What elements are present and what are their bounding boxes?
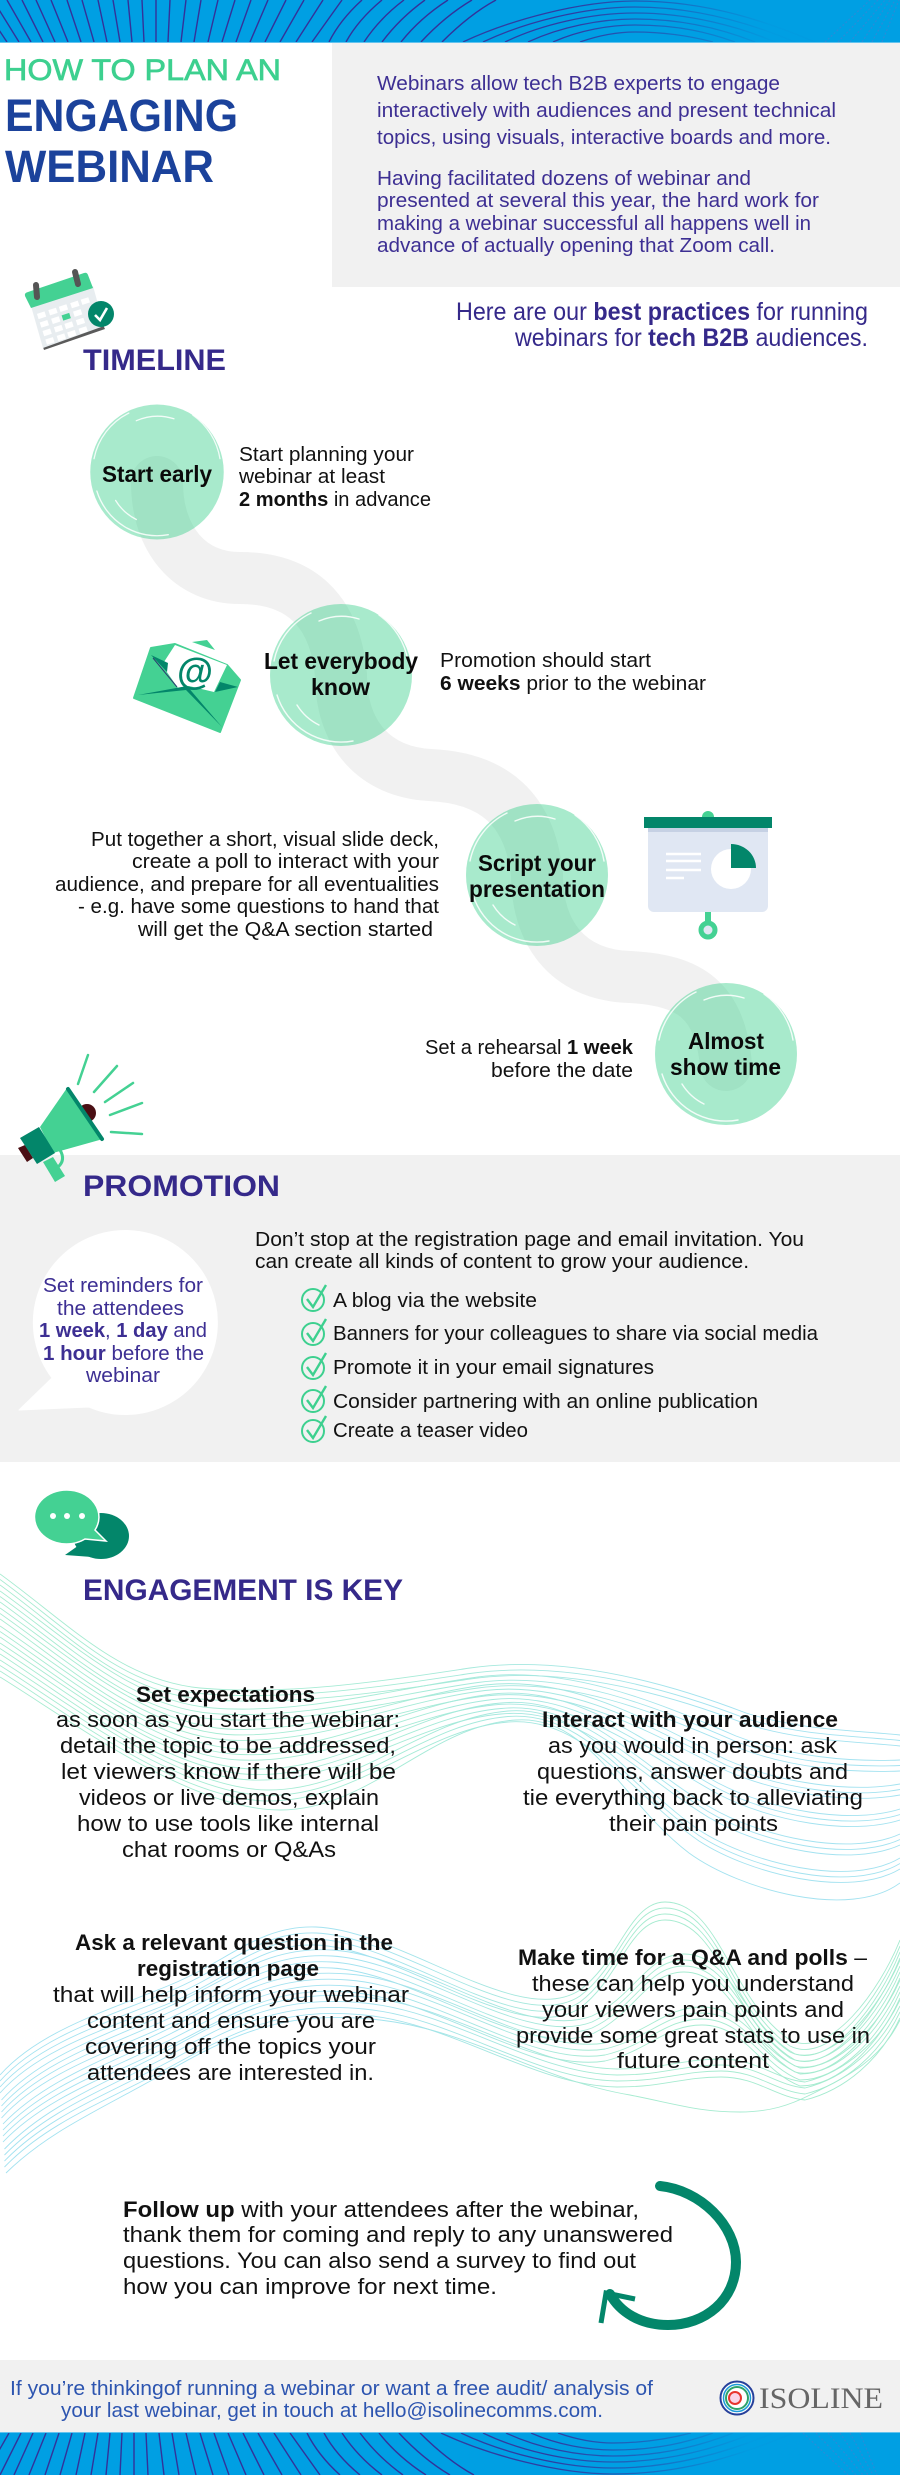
step 4: almost show time (425, 983, 797, 1125)
step 4 description: before the date (491, 1060, 633, 1082)
icon: email envelope (134, 640, 240, 732)
speech bubble reminder: Set reminders for (43, 1275, 203, 1297)
step 3 description: audience, and prepare for all eventualities (55, 874, 439, 896)
step 1 description: 2 months in advance (239, 489, 431, 511)
tip: follow up: thank them for coming and reply to any unanswered (123, 2222, 673, 2247)
check item 1: A blog via the website (333, 1290, 537, 1312)
step 1 description: Start planning your (239, 444, 414, 466)
step 1 label: Start early (102, 461, 212, 487)
step 3 label: Script your (478, 850, 596, 876)
icon: presentation board (644, 811, 772, 937)
arrow: circular follow up (601, 2186, 736, 2325)
tip: make time for Q&A and polls: Make time for a Q&A and polls – (518, 1945, 868, 1970)
tip: interact with your audience: questions, answer doubts and (537, 1759, 848, 1784)
step 4 circle (655, 983, 797, 1125)
check item 3: Promote it in your email signatures (333, 1357, 654, 1379)
panel: introduction (332, 43, 900, 287)
step 1 description: webinar at least (238, 466, 385, 488)
step 3 description (55, 829, 439, 941)
intro paragraph two: making a webinar successful all happens well in (377, 213, 811, 235)
step 3 label (469, 850, 605, 902)
bottom decorative band (0, 2432, 900, 2475)
tip: follow up: Follow up with your attendees after the webinar, (123, 2197, 639, 2222)
intro paragraph one: topics, using visuals, interactive boards and more. (377, 127, 831, 149)
intro paragraph two: presented at several this year, the hard work for (377, 190, 819, 212)
icon: megaphone (18, 1055, 142, 1182)
step 4 label: show time (670, 1054, 781, 1080)
step 3 description: - e.g. have some questions to hand that (78, 896, 439, 918)
step 3 circle (466, 804, 608, 946)
tip: ask a relevant question: covering off the topics your (85, 2034, 376, 2059)
promotion intro text: Don’t stop at the registration page and email invitation. You (255, 1229, 804, 1251)
step 2 label (264, 648, 418, 700)
tip: set expectations: detail the topic to be addressed, (60, 1733, 396, 1758)
tip: interact with your audience: as you would in person: ask (548, 1733, 838, 1758)
step 2 label: know (311, 674, 370, 700)
speech bubble reminder: 1 hour before the (43, 1343, 204, 1365)
tip: follow up: questions. You can also send a survey to find out (123, 2248, 636, 2273)
title (4, 54, 281, 192)
step 3 description: will get the Q&A section started (137, 919, 433, 941)
tip: set expectations: chat rooms or Q&As (122, 1837, 336, 1862)
timeline winding path (157, 482, 726, 1065)
title: ENGAGING (5, 90, 238, 141)
footer call to action: If you’re thinkingof running a webinar or want a free audit/ analysis of (10, 2378, 653, 2400)
promotion intro text: can create all kinds of content to grow your audience. (255, 1251, 749, 1273)
step 2 circle (270, 604, 412, 746)
step 3: script your presentation (55, 804, 608, 946)
tip: make time for Q&A and polls: future content (617, 2048, 769, 2073)
tip: ask a relevant question: content and ensure you are (87, 2008, 375, 2033)
tip: ask a relevant question: registration page (137, 1956, 319, 1981)
tip: interact with your audience: tie everything back to alleviating (523, 1785, 863, 1810)
check item 2: Banners for your colleagues to share via social media (333, 1323, 819, 1345)
speech bubble reminder (19, 1230, 217, 1414)
icon: chat bubbles (34, 1490, 129, 1559)
tip: interact with your audience (523, 1707, 863, 1836)
tip: set expectations: as soon as you start the webinar: (56, 1707, 400, 1732)
panel: footer (0, 2360, 900, 2432)
step 4 label (670, 1028, 781, 1080)
check item 4: Consider partnering with an online publication (333, 1391, 758, 1413)
step 2 label: Let everybody (264, 648, 418, 674)
tip: follow up (123, 2197, 673, 2299)
title: WEBINAR (5, 141, 214, 192)
step 2: let everybody know (264, 604, 706, 746)
tip: ask a relevant question: attendees are interested in. (87, 2060, 374, 2085)
step 2 description (440, 650, 706, 695)
icon: email envelope: @ (177, 651, 213, 692)
step 3 description: create a poll to interact with your (132, 851, 439, 873)
tip: set expectations (56, 1682, 400, 1862)
tip: interact with your audience: Interact with your audience (542, 1707, 838, 1732)
heading: engagement is key: ENGAGEMENT IS KEY (83, 1574, 403, 1607)
best practices statement: Here are our best practices for running (456, 298, 868, 326)
intro paragraph one: Webinars allow tech B2B experts to engage (377, 73, 780, 95)
Isoline logo: ISOLINE (759, 2382, 883, 2415)
step 1: start early (90, 405, 431, 539)
best practices statement: webinars for tech B2B audiences. (514, 324, 868, 352)
checklist (302, 1285, 819, 1442)
step 2 description: Promotion should start (440, 650, 651, 672)
tip: make time for Q&A and polls (516, 1945, 870, 2073)
tip: make time for Q&A and polls: these can help you understand (532, 1971, 854, 1996)
panel: promotion (0, 1155, 900, 1462)
promotion intro text (255, 1229, 804, 1273)
best practices statement (456, 298, 868, 352)
step 4 label: Almost (688, 1028, 764, 1054)
step 3 label: presentation (469, 876, 605, 902)
step 4 description: Set a rehearsal 1 week (425, 1037, 634, 1059)
title: HOW TO PLAN AN (4, 54, 281, 87)
speech bubble reminder: 1 week, 1 day and (39, 1320, 207, 1342)
step 4 description (425, 1037, 634, 1082)
tip: set expectations: Set expectations (136, 1682, 315, 1707)
speech bubble reminder: webinar (85, 1365, 160, 1387)
tip: interact with your audience: their pain points (609, 1811, 778, 1836)
intro paragraph two: advance of actually opening that Zoom call. (377, 235, 775, 257)
speech bubble reminder: the attendees (57, 1298, 184, 1320)
footer call to action (10, 2378, 653, 2422)
tip: follow up: how you can improve for next time. (123, 2274, 497, 2299)
check item 1 (302, 1285, 537, 1312)
step 2 description: 6 weeks prior to the webinar (440, 673, 706, 695)
intro paragraph two (377, 168, 819, 257)
tip: set expectations: how to use tools like internal (77, 1811, 379, 1836)
heading: promotion: PROMOTION (83, 1170, 280, 1203)
tip: set expectations: let viewers know if there will be (61, 1759, 396, 1784)
intro paragraph one: interactively with audiences and present technical (377, 100, 836, 122)
check item 5: Create a teaser video (333, 1420, 528, 1442)
intro paragraph two: Having facilitated dozens of webinar and (377, 168, 751, 190)
heading: timeline: TIMELINE (83, 344, 226, 377)
step 1 description (238, 444, 431, 511)
tip: set expectations: videos or live demos, explain (79, 1785, 379, 1810)
tip: make time for Q&A and polls: provide some great stats to use in (516, 2023, 870, 2048)
tip: make time for Q&A and polls: your viewers pain points and (542, 1997, 844, 2022)
tip: ask a relevant question (53, 1930, 409, 2085)
step 3 description: Put together a short, visual slide deck, (91, 829, 439, 851)
tip: ask a relevant question: that will help inform your webinar (53, 1982, 409, 2007)
tip: ask a relevant question: Ask a relevant question in the (75, 1930, 393, 1955)
icon: calendar (25, 272, 114, 350)
footer call to action: your last webinar, get in touch at hello@isolinecomms.com. (61, 2400, 603, 2422)
top decorative band (0, 0, 900, 43)
intro paragraph one (377, 73, 836, 149)
step 1 circle (90, 405, 224, 539)
wave line background (0, 1574, 900, 2173)
